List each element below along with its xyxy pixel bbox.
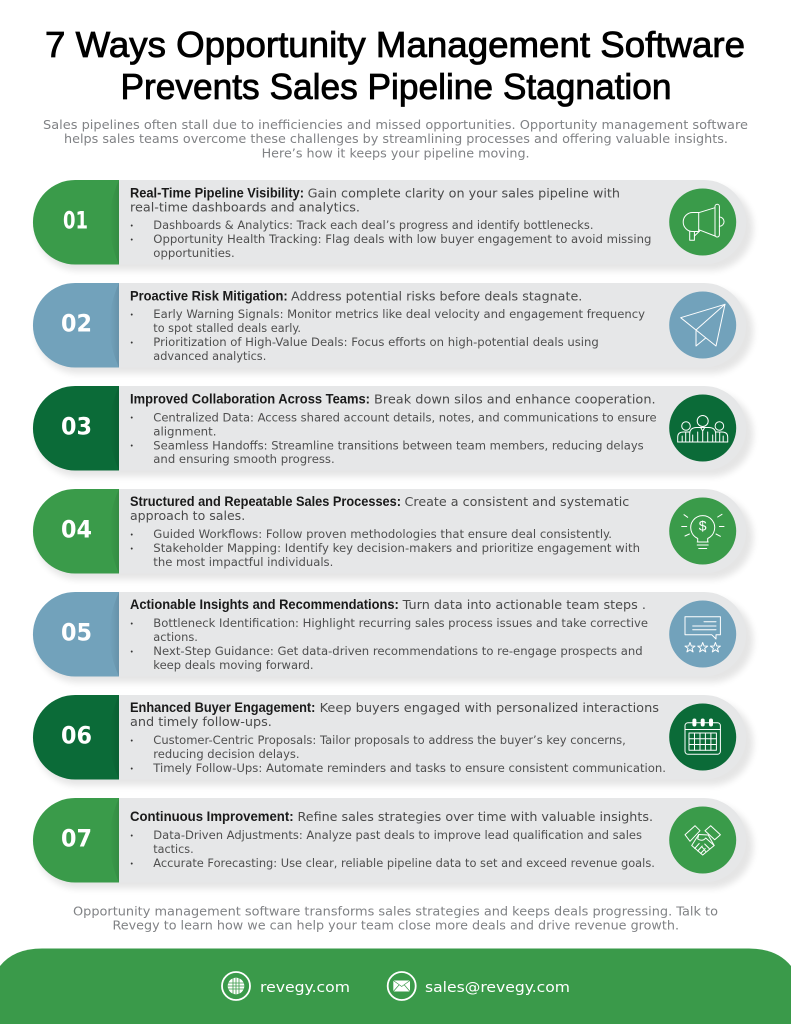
number badge 03: 03 <box>61 412 92 440</box>
number badge 04: 04 <box>61 516 92 544</box>
bullet list: • <box>130 223 134 230</box>
icon: light bulb with dollar sign: $ <box>699 518 707 534</box>
number badge 05: 05 <box>61 618 92 646</box>
panel: step 01 real-time pipeline visibility <box>33 180 753 270</box>
panel: step 07 continuous improvement <box>33 798 753 888</box>
bullet list: alignment. <box>153 424 216 438</box>
bullet list: Stakeholder Mapping: Identify key decision-makers and prioritize engagement with <box>153 541 640 555</box>
bullet list: • <box>130 833 134 840</box>
bullet list <box>130 616 648 672</box>
bullet list: • <box>130 766 134 773</box>
step heading: Address potential risks before deals stagnate. <box>291 288 582 303</box>
title: 7 Ways Opportunity Management Software <box>45 24 745 65</box>
icon: chat bubble with stars <box>669 600 736 668</box>
icon: handshake <box>669 806 736 874</box>
number badge 01 <box>33 180 119 264</box>
closing paragraph: Opportunity management software transforms sales strategies and keeps deals progressing. Talk to <box>73 904 718 919</box>
step heading <box>130 596 646 612</box>
bullet list: Prioritization of High-Value Deals: Focus efforts on high-potential deals using <box>153 335 599 349</box>
bullet list: Centralized Data: Access shared account details, notes, and communications to ensure <box>153 410 657 424</box>
bullet list: tactics. <box>153 842 194 856</box>
icon: calendar <box>669 704 736 770</box>
bullet list: • <box>130 340 134 347</box>
bullet list <box>130 307 645 363</box>
closing paragraph: Revegy to learn how we can help your team close more deals and drive revenue growth. <box>112 918 679 933</box>
step heading: Real-Time Pipeline Visibility: <box>130 184 304 200</box>
step heading: Enhanced Buyer Engagement: <box>130 699 315 715</box>
title: Prevents Sales Pipeline Stagnation <box>120 66 672 107</box>
panel: step 06 enhanced buyer engagement <box>33 695 753 786</box>
bullet list: Opportunity Health Tracking: Flag deals with low buyer engagement to avoid missing <box>153 232 651 246</box>
intro paragraph <box>43 117 748 160</box>
panel: step 05 actionable insights and recommendations <box>33 592 753 682</box>
step heading: Proactive Risk Mitigation: <box>130 287 288 303</box>
website contact <box>222 972 350 1000</box>
panel: step 04 structured and repeatable sales processes <box>33 489 753 580</box>
number badge 03 <box>33 386 119 470</box>
bullet list <box>130 410 657 466</box>
icon: paper plane <box>669 292 736 358</box>
footer band <box>0 948 791 1024</box>
bullet list: • <box>130 861 134 868</box>
step heading: approach to sales. <box>130 508 245 523</box>
bullet list: and ensuring smooth progress. <box>153 452 335 466</box>
bullet list <box>130 828 655 870</box>
step heading <box>130 808 653 824</box>
step heading: and timely follow-ups. <box>130 714 272 729</box>
bullet list: Guided Workflows: Follow proven methodologies that ensure deal consistently. <box>153 527 612 541</box>
bullet list: • <box>130 532 134 539</box>
bullet list: • <box>130 738 134 745</box>
step heading: Break down silos and enhance cooperation. <box>374 391 656 406</box>
bullet list: Seamless Handoffs: Streamline transitions between team members, reducing delays <box>153 438 644 452</box>
step heading <box>130 493 629 523</box>
email contact <box>388 972 570 1000</box>
step heading: Refine sales strategies over time with valuable insights. <box>298 809 653 824</box>
bullet list: keep deals moving forward. <box>153 658 314 672</box>
icon: team of people <box>669 394 736 462</box>
bullet list: • <box>130 649 134 656</box>
number badge 04 <box>33 489 119 574</box>
bullet list: Dashboards & Analytics: Track each deal’s progress and identify bottlenecks. <box>153 218 594 232</box>
bullet list <box>130 527 640 569</box>
step heading <box>130 699 659 729</box>
step heading <box>130 184 620 214</box>
bullet list: • <box>130 546 134 553</box>
bullet list <box>130 733 666 775</box>
number badge 07: 07 <box>61 824 92 852</box>
number badge 07 <box>33 798 119 882</box>
bullet list: the most impactful individuals. <box>153 555 333 569</box>
bullet list: Next-Step Guidance: Get data-driven recommendations to re-engage prospects and <box>153 644 643 658</box>
bullet list: actions. <box>153 630 198 644</box>
intro paragraph: Here’s how it keeps your pipeline moving. <box>262 146 530 160</box>
number badge 01: 01 <box>63 206 88 234</box>
bullet list: Accurate Forecasting: Use clear, reliable pipeline data to set and exceed revenue goals. <box>153 856 655 870</box>
step heading <box>130 287 582 303</box>
bullet list: Data-Driven Adjustments: Analyze past deals to improve lead qualification and sales <box>153 828 642 842</box>
icon: light bulb with dollar sign <box>669 498 736 564</box>
step heading: Improved Collaboration Across Teams: <box>130 390 370 406</box>
number badge 02: 02 <box>61 310 92 338</box>
bullet list: Timely Follow-Ups: Automate reminders and tasks to ensure consistent communication. <box>152 761 666 775</box>
bullet list: opportunities. <box>153 246 235 260</box>
step heading: Continuous Improvement: <box>130 808 294 824</box>
email contact: sales@revegy.com <box>425 980 570 996</box>
title <box>45 24 745 107</box>
bullet list: • <box>130 415 134 422</box>
step heading: Structured and Repeatable Sales Processes: <box>130 493 401 509</box>
bullet list: Customer-Centric Proposals: Tailor proposals to address the buyer’s key concerns, <box>153 733 626 747</box>
panel: step 03 improved collaboration across teams <box>33 386 753 476</box>
panel: step 02 proactive risk mitigation <box>33 283 753 374</box>
closing paragraph <box>73 904 718 933</box>
number badge 02 <box>33 283 119 368</box>
number badge 06 <box>33 695 119 780</box>
step heading: Gain complete clarity on your sales pipeline with <box>308 185 620 200</box>
bullet list: to spot stalled deals early. <box>153 321 301 335</box>
intro paragraph: helps sales teams overcome these challenges by streamlining processes and offering valuable insights. <box>64 131 728 146</box>
bullet list: • <box>130 621 134 628</box>
bullet list: reducing decision delays. <box>153 747 300 761</box>
bullet list: Bottleneck Identification: Highlight recurring sales process issues and take corrective <box>153 616 648 630</box>
step heading: real-time dashboards and analytics. <box>130 199 360 214</box>
step heading: Keep buyers engaged with personalized interactions <box>320 700 659 715</box>
number badge 05 <box>33 592 119 676</box>
icon: megaphone <box>669 188 736 256</box>
bullet list: • <box>130 312 134 319</box>
bullet list: • <box>130 237 134 244</box>
number badge 06: 06 <box>61 722 92 750</box>
bullet list: advanced analytics. <box>153 349 266 363</box>
bullet list: Early Warning Signals: Monitor metrics like deal velocity and engagement frequency <box>153 307 645 321</box>
website contact: revegy.com <box>260 980 350 996</box>
bullet list <box>130 218 651 260</box>
bullet list: • <box>130 443 134 450</box>
intro paragraph: Sales pipelines often stall due to inefficiencies and missed opportunities. Opportunity management software <box>43 117 748 132</box>
step heading <box>130 390 656 406</box>
step heading: Actionable Insights and Recommendations: <box>130 596 399 612</box>
step heading: Turn data into actionable team steps . <box>402 597 646 612</box>
step heading: Create a consistent and systematic <box>404 494 629 509</box>
